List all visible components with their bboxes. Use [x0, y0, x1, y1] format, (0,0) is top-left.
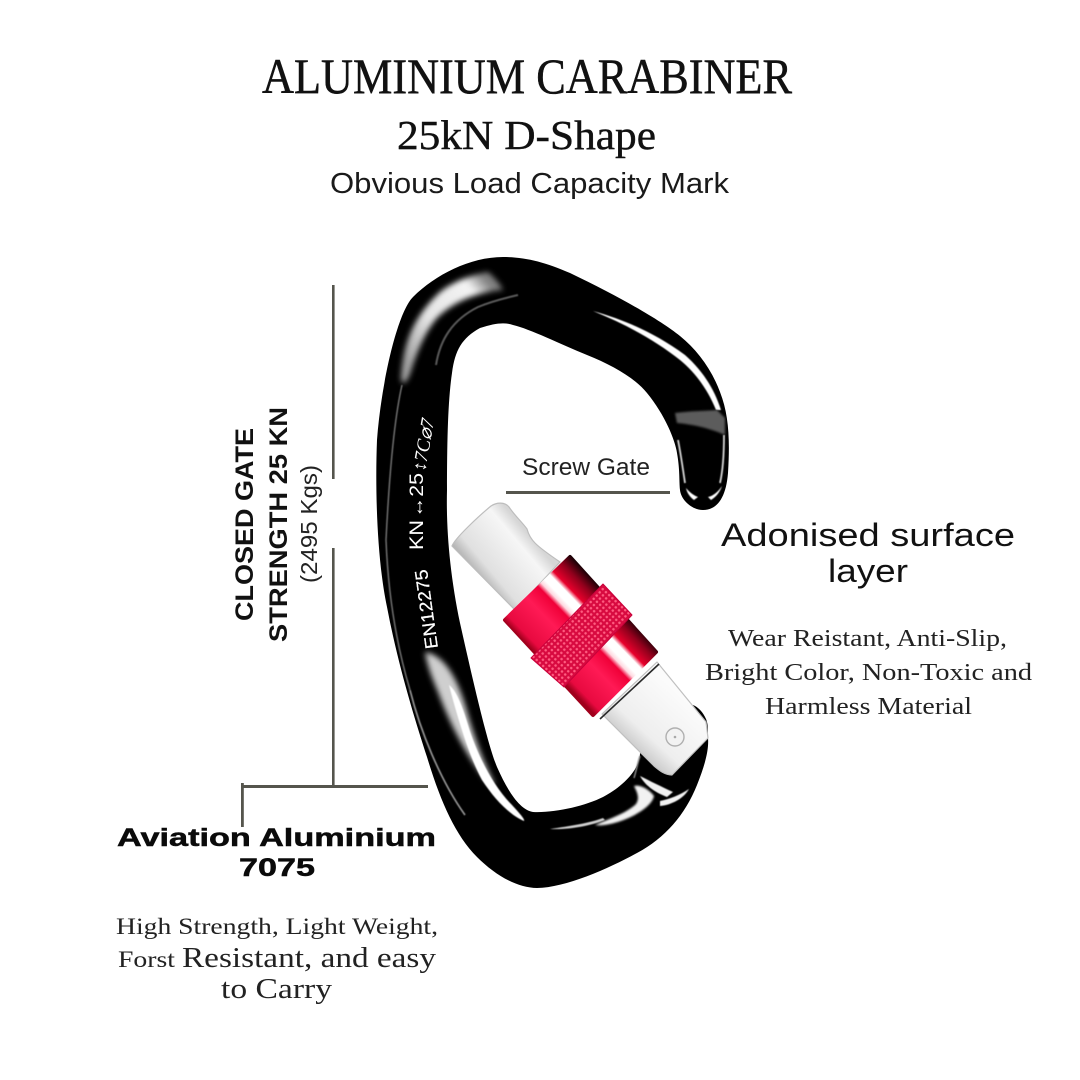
- label: screw gate: [506, 454, 670, 494]
- label: closed gate strength: CLOSED GATE: [231, 428, 259, 621]
- body highlights: [386, 272, 725, 829]
- red locking sleeve: [505, 557, 659, 719]
- label: screw gate: Screw Gate: [522, 454, 650, 481]
- engraved marking: ↕7C⌀7: [409, 416, 439, 473]
- description: aviation aluminium: Forst: [118, 947, 176, 972]
- label: aviation aluminium: [117, 824, 436, 882]
- description: aviation aluminium: to Carry: [221, 973, 333, 1005]
- gate rivet: [666, 728, 684, 746]
- title: ALUMINIUM CARABINER: [262, 48, 793, 104]
- description: anodised surface: [705, 626, 1032, 720]
- label: aviation aluminium: 7075: [239, 854, 315, 882]
- carabiner body: [376, 257, 729, 888]
- description: aviation aluminium: Resistant, and easy: [182, 942, 437, 974]
- tagline: Obvious Load Capacity Mark: [330, 168, 730, 200]
- description: anodised surface: Bright Color, Non-Toxic and: [705, 660, 1032, 686]
- screw gate bar: [452, 503, 708, 775]
- label: aviation aluminium: Aviation Aluminium: [117, 824, 436, 852]
- description: anodised surface: Wear Reistant, Anti-Slip,: [728, 626, 1007, 652]
- description: aviation aluminium: High Strength, Light Weight,: [116, 914, 438, 939]
- description: aviation aluminium: [116, 914, 438, 1005]
- label: closed gate strength: [231, 407, 322, 642]
- label: closed gate strength: (2495 Kgs): [296, 465, 322, 583]
- label: closed gate strength: STRENGTH 25 KN: [265, 407, 293, 642]
- knurled band: [531, 584, 632, 687]
- label: anodised surface: Adonised surface: [721, 517, 1015, 553]
- label: anodised surface: [721, 517, 1015, 589]
- engraved marking: ↔25: [407, 473, 428, 518]
- subtitle: 25kN D-Shape: [397, 112, 656, 158]
- material leader line: [241, 783, 428, 827]
- engraved marking: KN: [407, 520, 428, 550]
- strength dimension line: [332, 285, 335, 786]
- label: anodised surface: layer: [828, 553, 908, 589]
- engraved marking: EN12275: [411, 568, 442, 650]
- description: anodised surface: Harmless Material: [765, 694, 972, 720]
- engraved marking: [407, 416, 442, 650]
- carabiner illustration: [376, 257, 729, 888]
